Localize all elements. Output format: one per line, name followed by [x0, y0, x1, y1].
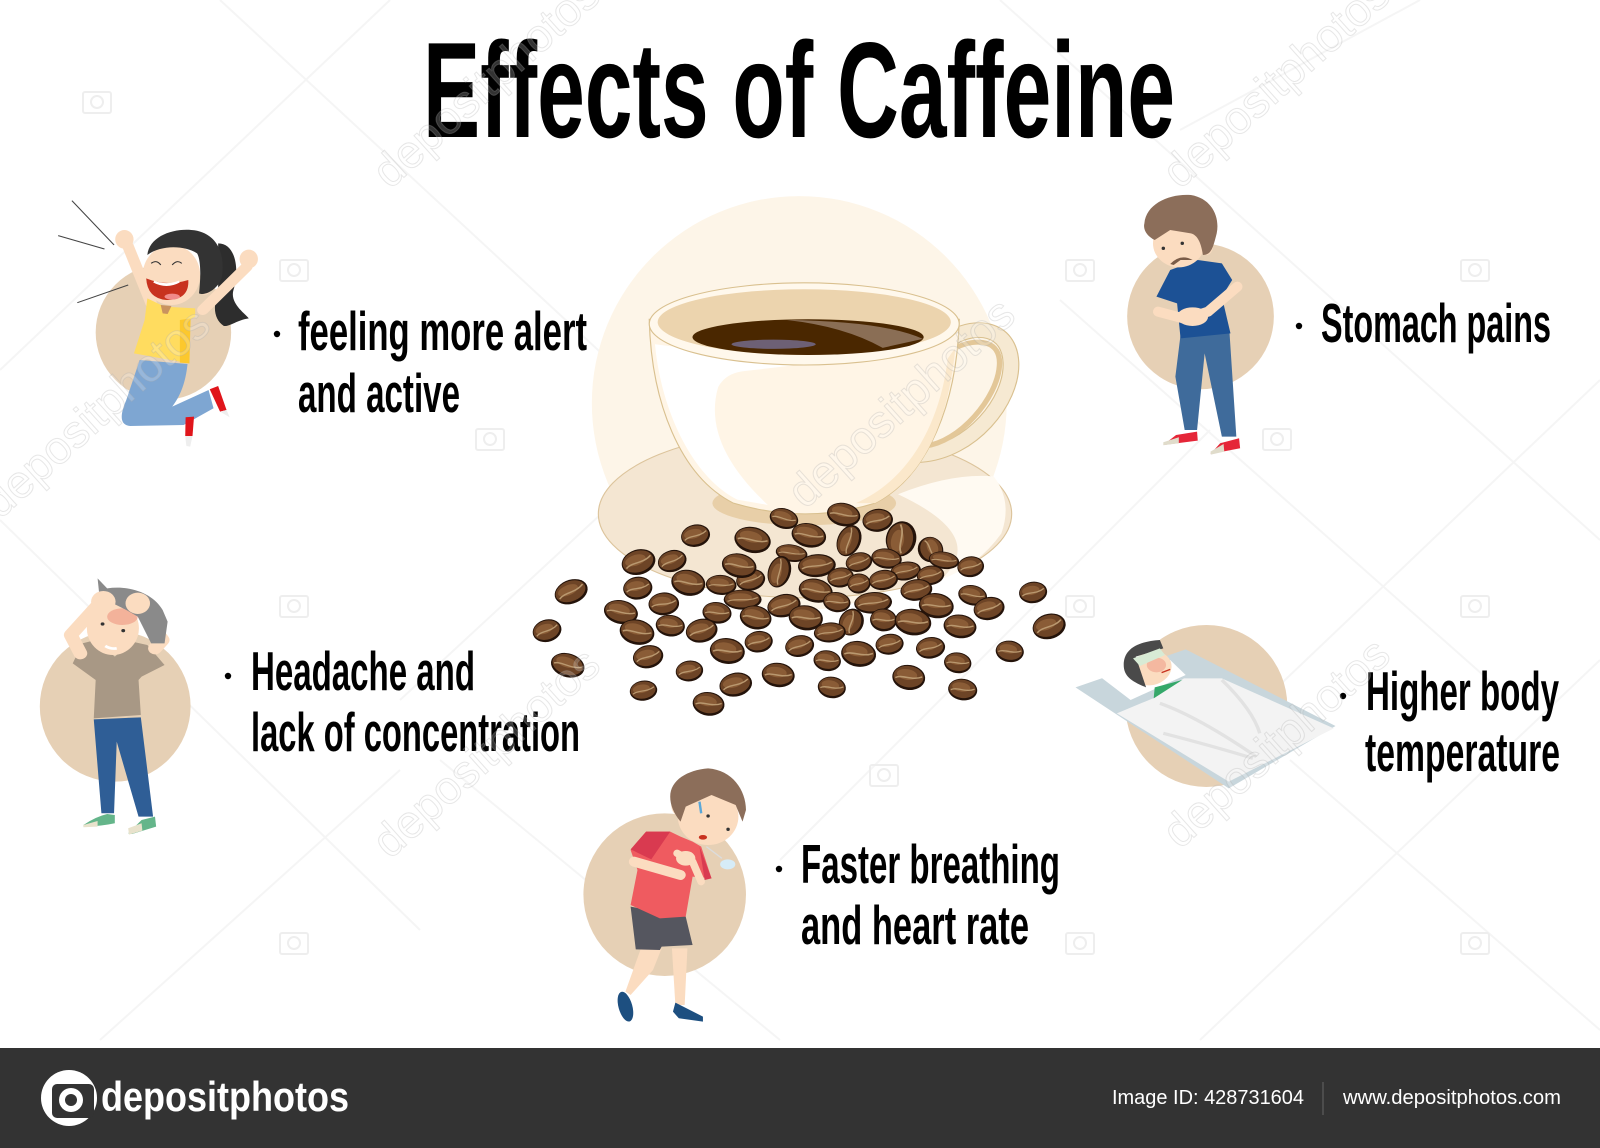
image id: Image ID: 428731604	[1112, 1087, 1304, 1109]
bullet	[776, 866, 782, 872]
cup handle	[921, 330, 1011, 455]
panel: faster breathing	[583, 768, 1060, 1023]
logo: depositphotos	[101, 1073, 349, 1120]
panel: stomach pains	[1127, 195, 1551, 455]
bullet	[225, 673, 231, 679]
icon: boy clutching chest	[583, 768, 746, 1023]
label: and heart rate	[801, 894, 1029, 956]
panel: higher body temperature	[1075, 625, 1560, 788]
text: depositphotos	[1152, 627, 1400, 857]
label: and active	[298, 362, 460, 424]
text: depositphotos	[362, 637, 610, 867]
coffee beans	[529, 499, 1070, 718]
saucer	[598, 430, 1012, 598]
watermark cameras	[83, 92, 1489, 954]
cup rim and coffee	[649, 283, 959, 365]
label	[801, 833, 1060, 956]
label: Faster breathing	[801, 833, 1060, 895]
footer bar	[0, 1048, 1600, 1148]
icon: sick person in bed	[1075, 625, 1336, 788]
bullet	[274, 331, 280, 337]
illustration: coffee cup and beans	[529, 196, 1070, 718]
label	[251, 640, 580, 763]
background circle	[592, 196, 1007, 610]
icon: jumping girl	[58, 201, 258, 447]
panel: headache	[40, 578, 580, 835]
logo	[41, 1070, 349, 1126]
label: Headache and	[251, 640, 475, 702]
title: Effects of Caffeine	[423, 14, 1175, 166]
website: www.depositphotos.com	[1342, 1087, 1561, 1109]
label	[1365, 660, 1560, 783]
icon: man holding stomach	[1127, 195, 1274, 455]
text: depositphotos	[777, 287, 1025, 517]
cup body	[649, 283, 959, 514]
label: feeling more alert	[298, 300, 587, 362]
icon: man holding head	[40, 578, 191, 835]
label: lack of concentration	[251, 701, 580, 763]
panel: feeling more alert	[58, 201, 587, 447]
bullet	[1340, 693, 1346, 699]
bullet	[1296, 323, 1302, 329]
label	[298, 300, 587, 424]
